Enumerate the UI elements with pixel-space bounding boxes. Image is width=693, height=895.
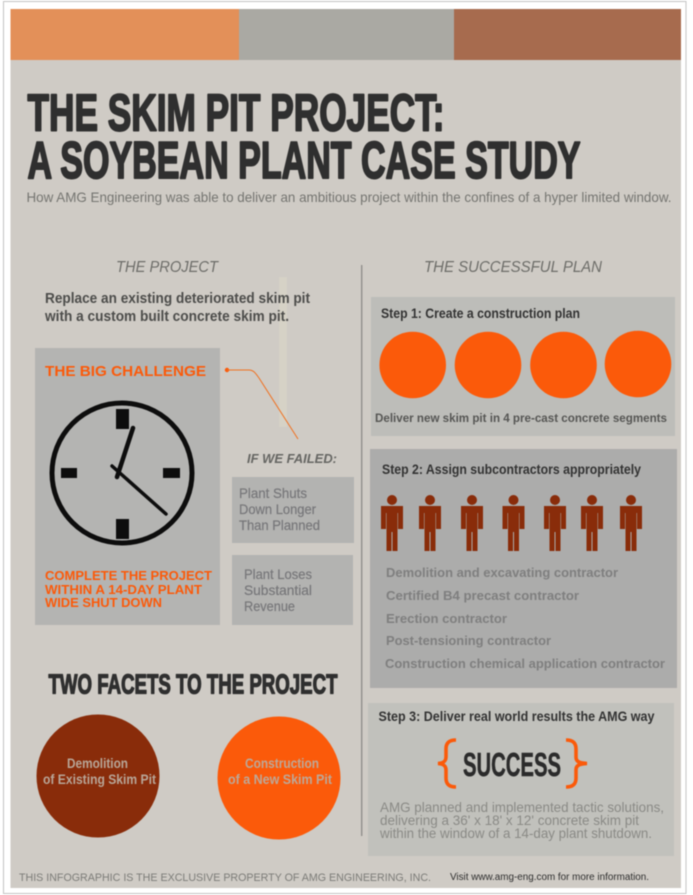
panel: the big challenge bbox=[35, 348, 220, 625]
challenge description bbox=[45, 568, 212, 610]
circle: demolition: Demolition bbox=[67, 755, 128, 771]
panel: step 2 bbox=[370, 449, 677, 688]
heading: the successful plan: THE SUCCESSFUL PLAN bbox=[424, 259, 602, 276]
step 1 caption: Deliver new skim pit in 4 pre-cast concrete segments bbox=[375, 411, 667, 425]
contractor list bbox=[385, 565, 665, 671]
heading: two facets: TWO FACETS TO THE PROJECT bbox=[48, 668, 338, 700]
contractor list: Certified B4 precast contractor bbox=[386, 588, 579, 603]
panel: plant shuts down: Plant Shuts bbox=[239, 485, 307, 501]
contractor list: Demolition and excavating contractor bbox=[386, 565, 618, 580]
four concrete segments bbox=[379, 331, 671, 398]
circle: construction: Construction bbox=[245, 755, 319, 771]
challenge description: WIDE SHUT DOWN bbox=[45, 595, 162, 610]
contractor list: Post-tensioning contractor bbox=[386, 633, 551, 648]
icon: clock bbox=[52, 403, 192, 543]
footer: ownership note: THIS INFOGRAPHIC IS THE EXCLUSIVE PROPERTY OF AMG ENGINEERING, INC. bbox=[19, 872, 431, 884]
success callout: SUCCESS bbox=[463, 746, 561, 783]
contractor list: Construction chemical application contractor bbox=[385, 656, 665, 671]
challenge description: COMPLETE THE PROJECT bbox=[45, 568, 212, 583]
subtitle: How AMG Engineering was able to deliver an ambitious project within the confines of a hyper limited window. bbox=[26, 189, 672, 205]
circle: construction bbox=[218, 716, 340, 840]
step 3 description bbox=[379, 799, 664, 841]
panel: plant shuts down: Than Planned bbox=[239, 517, 320, 533]
arrow: connector to failure outcomes bbox=[225, 368, 298, 439]
contractor list: Erection contractor bbox=[386, 611, 507, 626]
project description: Replace an existing deteriorated skim pit bbox=[45, 290, 310, 307]
challenge heading: THE BIG CHALLENGE bbox=[45, 363, 206, 380]
step 1 heading: Step 1: Create a construction plan bbox=[381, 305, 580, 321]
step 3 description: delivering a 36' x 18' x 12' concrete skim pit bbox=[380, 812, 639, 828]
panel: plant loses revenue: Substantial bbox=[244, 582, 312, 598]
pale dotted vertical strip bbox=[279, 277, 287, 427]
step 2 heading: Step 2: Assign subcontractors appropriately bbox=[382, 461, 641, 477]
circle: demolition: of Existing Skim Pit bbox=[43, 771, 156, 787]
step 3 heading: Step 3: Deliver real world results the AMG way bbox=[378, 708, 655, 724]
step 3 description: within the window of a 14-day plant shutdown. bbox=[379, 825, 652, 841]
title bbox=[28, 84, 580, 190]
success callout bbox=[438, 740, 587, 787]
panel: plant loses revenue bbox=[232, 555, 353, 625]
header colour band bbox=[10, 9, 681, 60]
step 3 description: AMG planned and implemented tactic solutions, bbox=[380, 799, 664, 815]
panel: plant shuts down bbox=[232, 477, 354, 543]
icon row: seven workers bbox=[381, 495, 642, 551]
footer: website: Visit www.amg-eng.com for more information. bbox=[450, 872, 649, 883]
title: THE SKIM PIT PROJECT: bbox=[28, 84, 444, 142]
heading: the project: THE PROJECT bbox=[116, 259, 219, 276]
heading: if we failed: IF WE FAILED: bbox=[247, 451, 337, 466]
panel: plant shuts down: Down Longer bbox=[239, 501, 316, 517]
project description: with a custom built concrete skim pit. bbox=[44, 308, 289, 325]
circle: demolition bbox=[36, 714, 160, 838]
panel: plant loses revenue: Revenue bbox=[244, 598, 295, 614]
column divider bbox=[361, 265, 363, 836]
panel: step 3 bbox=[368, 703, 674, 856]
panel: plant loses revenue: Plant Loses bbox=[244, 566, 312, 582]
project description bbox=[44, 290, 310, 325]
circle: construction: of a New Skim Pit bbox=[228, 771, 332, 787]
challenge description: WITHIN A 14-DAY PLANT bbox=[45, 582, 202, 597]
panel: step 1 bbox=[371, 297, 675, 436]
